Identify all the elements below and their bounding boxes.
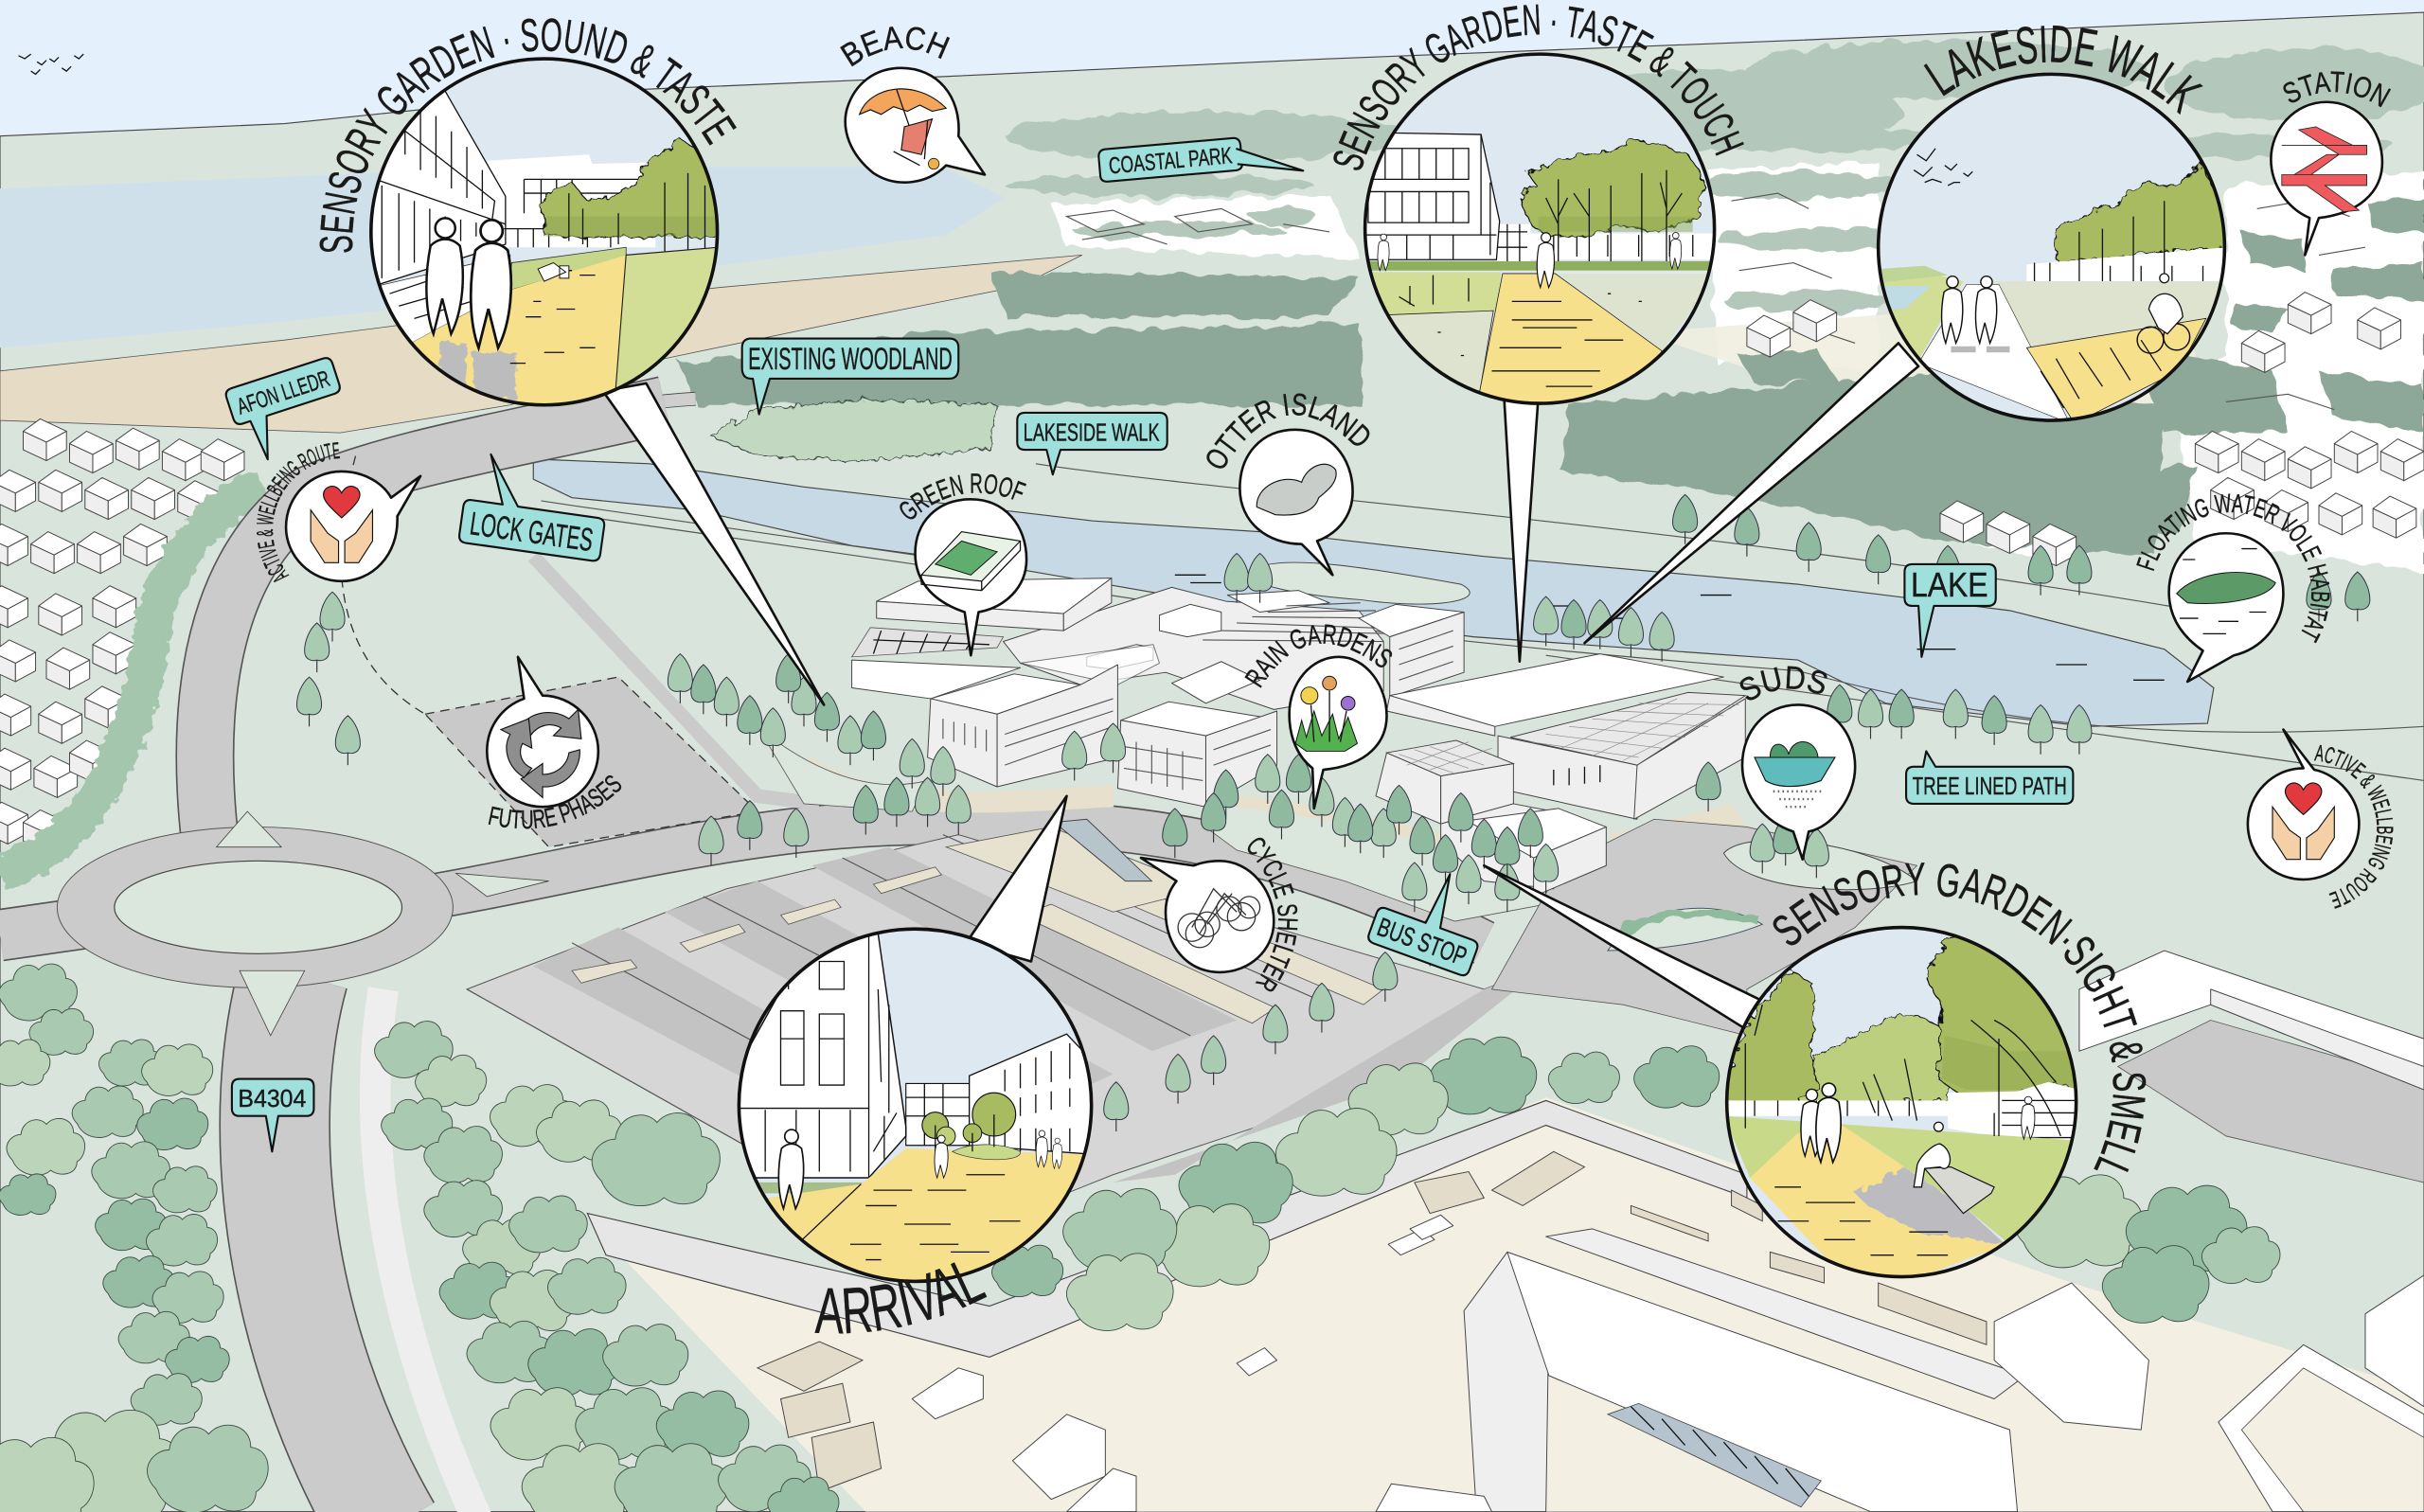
bubble: cycle shelter	[1141, 858, 1274, 972]
tag: coastal park: COASTAL PARK	[1108, 143, 1234, 179]
pointer: arrival	[966, 796, 1067, 961]
estuary water	[0, 167, 1005, 347]
label: rain gardens: RAIN GARDENS	[1244, 624, 1392, 688]
bubble: suds	[1742, 704, 1855, 860]
large trees centre left cluster	[375, 1022, 839, 1512]
bubble: active and wellbeing route west	[286, 471, 420, 581]
label: beach: BEACH	[840, 27, 951, 66]
pointer: taste and touch	[1505, 399, 1538, 662]
label: station: STATION	[2283, 71, 2391, 108]
top right warehouse	[2079, 951, 2424, 1183]
left town houses	[0, 418, 244, 852]
tag: lock gates	[458, 452, 612, 561]
car park	[467, 827, 1546, 1236]
label: green roof: GREEN ROOF	[900, 473, 1026, 519]
tag: lock gates: LOCK GATES	[468, 506, 596, 559]
label: active and wellbeing route east: ACTIVE & WELLBEING ROUTE	[2314, 744, 2394, 909]
beach sand	[0, 255, 1082, 433]
boundary tree belt	[992, 1037, 1720, 1331]
tag: afon lledr	[224, 356, 354, 466]
bubble: floating water vole habitat	[2169, 533, 2283, 682]
vignette: lakeside walk	[1875, 73, 2229, 425]
roads	[0, 405, 1484, 1512]
heading: sensory garden taste and touch: SENSORY GARDEN · TASTE & TOUCH	[1333, 4, 1744, 170]
lake	[533, 459, 2214, 726]
tag: tree lined path: TREE LINED PATH	[1913, 772, 2067, 800]
hedge along left road	[0, 487, 263, 873]
industrial yard	[596, 1097, 2424, 1512]
pointer: sight and smell	[1484, 865, 1761, 1028]
tag: existing woodland	[742, 339, 958, 415]
heading: lakeside walk: LAKESIDE WALK	[1924, 25, 2203, 116]
label: cycle shelter: CYCLE SHELTER	[1248, 837, 1298, 992]
canal road and lock gates	[371, 399, 696, 464]
flock of birds	[19, 54, 83, 74]
cycle shelter roof	[1054, 819, 1151, 881]
tag: lake: LAKE	[1911, 565, 1988, 604]
ripples on lake	[1175, 575, 2165, 680]
tag: lakeside walk: LAKESIDE WALK	[1024, 418, 1160, 446]
woodland and field patches	[680, 40, 2424, 557]
vignette: sensory garden sound and taste	[356, 59, 726, 406]
planted ground and paths around buildings	[758, 726, 1747, 921]
tag: coastal park	[1098, 133, 1303, 188]
label: floating water vole habitat: FLOATING WATER VOLE HABITAT	[2136, 493, 2330, 644]
stacked pallets and vehicles in yard	[758, 1151, 1987, 1512]
vignette: sensory garden sight and smell	[1720, 924, 2084, 1283]
right town houses	[1747, 293, 2424, 566]
boundary wall	[587, 1100, 1747, 1357]
tag: lake	[1904, 564, 1996, 657]
otter island in lake	[1252, 562, 1470, 604]
pale farmland patch	[1639, 294, 2211, 418]
bubble: otter island	[1239, 430, 1353, 575]
tag: b4304: B4304	[238, 1084, 306, 1112]
label: otter island: OTTER ISLAND	[1206, 394, 1369, 469]
tag: b4304	[232, 1079, 313, 1151]
bubble: beach	[846, 68, 985, 183]
pointer: sound and taste	[603, 383, 824, 704]
label: future phases: FUTURE PHASES	[489, 774, 621, 829]
bubble: active and wellbeing route east	[2248, 730, 2359, 880]
far town roofs linework	[1067, 193, 2365, 410]
large trees bottom left column	[0, 964, 268, 1512]
far town white areas	[1051, 162, 2424, 572]
tag: afon lledr: AFON LLEDR	[234, 366, 333, 420]
tag: lakeside walk	[1017, 413, 1167, 474]
vignette: sensory garden taste and touch	[1361, 51, 1720, 410]
bubble: station	[2271, 102, 2382, 255]
bubble: future phases	[487, 657, 598, 807]
suds drive and green	[1492, 819, 1916, 1036]
bubble: rain gardens	[1290, 657, 1386, 809]
roundabout	[57, 811, 549, 1036]
pointer: lakeside walk	[1584, 343, 1918, 643]
campus trees	[296, 494, 2370, 1131]
future phases plot	[341, 456, 819, 847]
bubble: green roof	[916, 499, 1026, 655]
existing woodland	[711, 399, 997, 461]
lakeside path lines	[541, 464, 2424, 780]
label: active and wellbeing route west: ACTIVE & WELLBEING ROUTE	[256, 442, 341, 583]
heading: sensory garden sound and taste: SENSORY GARDEN · SOUND & TASTE	[320, 18, 737, 253]
central campus buildings	[852, 578, 1745, 897]
heading: arrival: ARRIVAL	[814, 1262, 987, 1334]
main warehouse	[1376, 1229, 2025, 1512]
vignette: arrival	[726, 926, 1097, 1286]
trees right of sight and smell circle	[2014, 1175, 2280, 1323]
tag: bus stop	[1366, 855, 1498, 977]
bottom right buildings	[1994, 1275, 2424, 1512]
tag: tree lined path	[1906, 751, 2073, 804]
heading: sensory garden sight and smell: SENSORY GARDEN·SIGHT & SMELL	[1773, 863, 2146, 1172]
lock gates building	[464, 433, 526, 461]
tag: bus stop: BUS STOP	[1374, 912, 1470, 971]
label: suds: SUDS	[1740, 667, 1827, 701]
tag: existing woodland: EXISTING WOODLAND	[748, 341, 953, 376]
